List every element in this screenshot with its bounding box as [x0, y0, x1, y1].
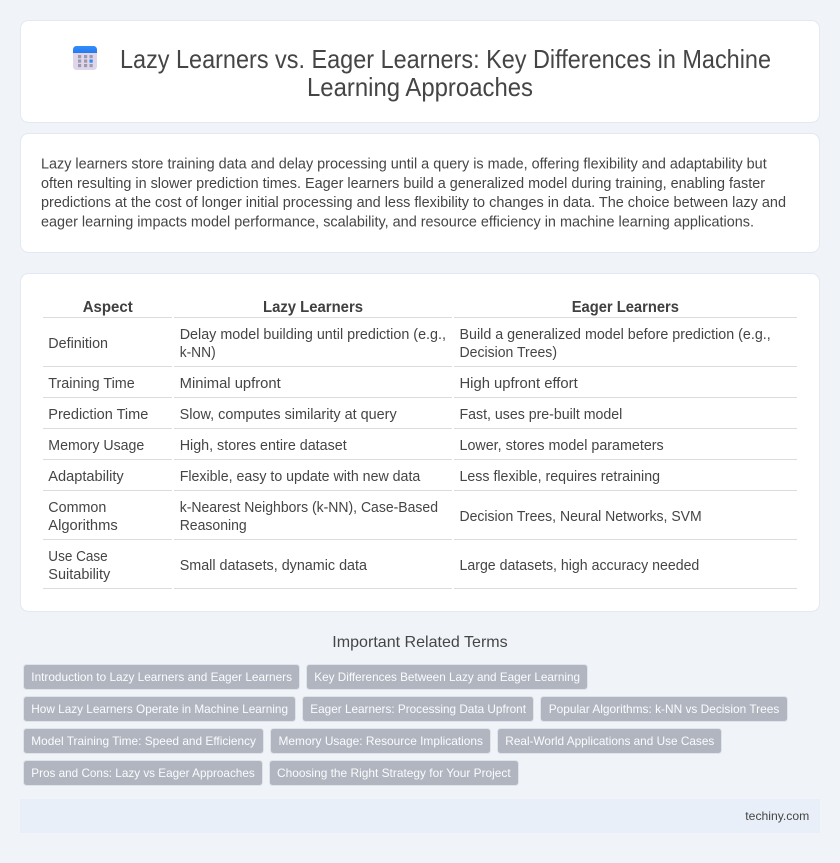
panel: related term tags: Key Differences Between Lazy and Eager Learning — [314, 670, 580, 684]
panel: summary paragraph: eager learning impacts model performance, scalability, and resource efficiency in machine learning applications. — [41, 214, 754, 230]
title: Lazy Learners vs. Eager Learners: Key Differences in Machine — [120, 46, 771, 74]
row: training time: Training Time — [48, 376, 135, 392]
panel: comparison table — [20, 274, 820, 612]
row: adaptability — [48, 469, 660, 485]
row: adaptability: Flexible, easy to update with new data — [180, 469, 420, 485]
panel: related term tags: Memory Usage: Resource Implications — [278, 734, 483, 748]
row: adaptability: Adaptability — [48, 469, 125, 485]
title: Learning Approaches — [307, 74, 533, 102]
row: common algorithms: Algorithms — [48, 518, 118, 534]
panel: related term tags: Real-World Applications and Use Cases — [505, 734, 714, 748]
panel: related term tags: Model Training Time: Speed and Efficiency — [31, 734, 256, 748]
row: definition: Delay model building until prediction (e.g., — [180, 327, 446, 343]
panel: summary paragraph: predictions at the cost of longer initial processing and less flexibility to changes in data. The choice between lazy and — [41, 195, 786, 211]
panel: related term tags: Introduction to Lazy Learners and Eager Learners — [31, 670, 292, 684]
title — [120, 46, 771, 102]
panel: related term tags: Pros and Cons: Lazy vs Eager Approaches — [31, 766, 255, 780]
row: memory usage: Lower, stores model parameters — [460, 438, 664, 454]
row: definition — [48, 327, 771, 361]
row: common algorithms — [48, 500, 702, 534]
heading: important related terms: Important Related Terms — [332, 634, 508, 651]
row: training time — [48, 376, 578, 392]
row: prediction time: Slow, computes similarity at query — [180, 407, 397, 423]
row: memory usage — [48, 438, 664, 454]
row: prediction time — [48, 407, 622, 423]
table header row: Eager Learners — [572, 299, 679, 316]
row: training time: High upfront effort — [460, 376, 578, 392]
table header row: Aspect — [83, 299, 133, 316]
table header row — [83, 299, 679, 316]
row: adaptability: Less flexible, requires retraining — [460, 469, 660, 485]
row: use case suitability: Suitability — [48, 567, 111, 583]
panel: related term tags — [24, 664, 788, 786]
row: definition: Definition — [48, 336, 108, 352]
panel: related term tags: Eager Learners: Processing Data Upfront — [310, 702, 527, 716]
panel: summary paragraph — [20, 134, 820, 252]
table header row: Lazy Learners — [263, 299, 363, 316]
row: definition: k-NN) — [180, 345, 216, 361]
panel: summary paragraph: Lazy learners store training data and delay processing until a query is made, offering flexibility and adaptability but — [41, 156, 767, 172]
panel: related term tags: Popular Algorithms: k-NN vs Decision Trees — [549, 702, 779, 716]
panel: related term tags: How Lazy Learners Operate in Machine Learning — [31, 702, 288, 716]
row: common algorithms: Common — [48, 500, 106, 516]
row: prediction time: Prediction Time — [48, 407, 148, 423]
row: common algorithms: k-Nearest Neighbors (k-NN), Case-Based — [180, 500, 438, 516]
row: use case suitability: Large datasets, high accuracy needed — [460, 558, 699, 574]
icon: calendar — [73, 46, 97, 70]
row: memory usage: Memory Usage — [48, 438, 144, 454]
panel: summary paragraph: often resulting in slower prediction times. Eager learners build a generalized model during training, enabling faster — [41, 176, 765, 192]
footer — [20, 799, 820, 833]
footer: techiny.com — [745, 809, 809, 823]
row: use case suitability: Use Case — [48, 549, 108, 565]
row: use case suitability: Small datasets, dynamic data — [180, 558, 367, 574]
row: training time: Minimal upfront — [180, 376, 281, 392]
row: definition: Build a generalized model before prediction (e.g., — [460, 327, 771, 343]
row: common algorithms: Reasoning — [180, 518, 247, 534]
panel: related term tags: Choosing the Right Strategy for Your Project — [277, 766, 511, 780]
row: prediction time: Fast, uses pre-built model — [460, 407, 622, 423]
row: definition: Decision Trees) — [460, 345, 557, 361]
row: common algorithms: Decision Trees, Neural Networks, SVM — [460, 509, 702, 525]
panel: header — [20, 20, 820, 122]
row: memory usage: High, stores entire dataset — [180, 438, 347, 454]
row: use case suitability — [48, 549, 699, 583]
